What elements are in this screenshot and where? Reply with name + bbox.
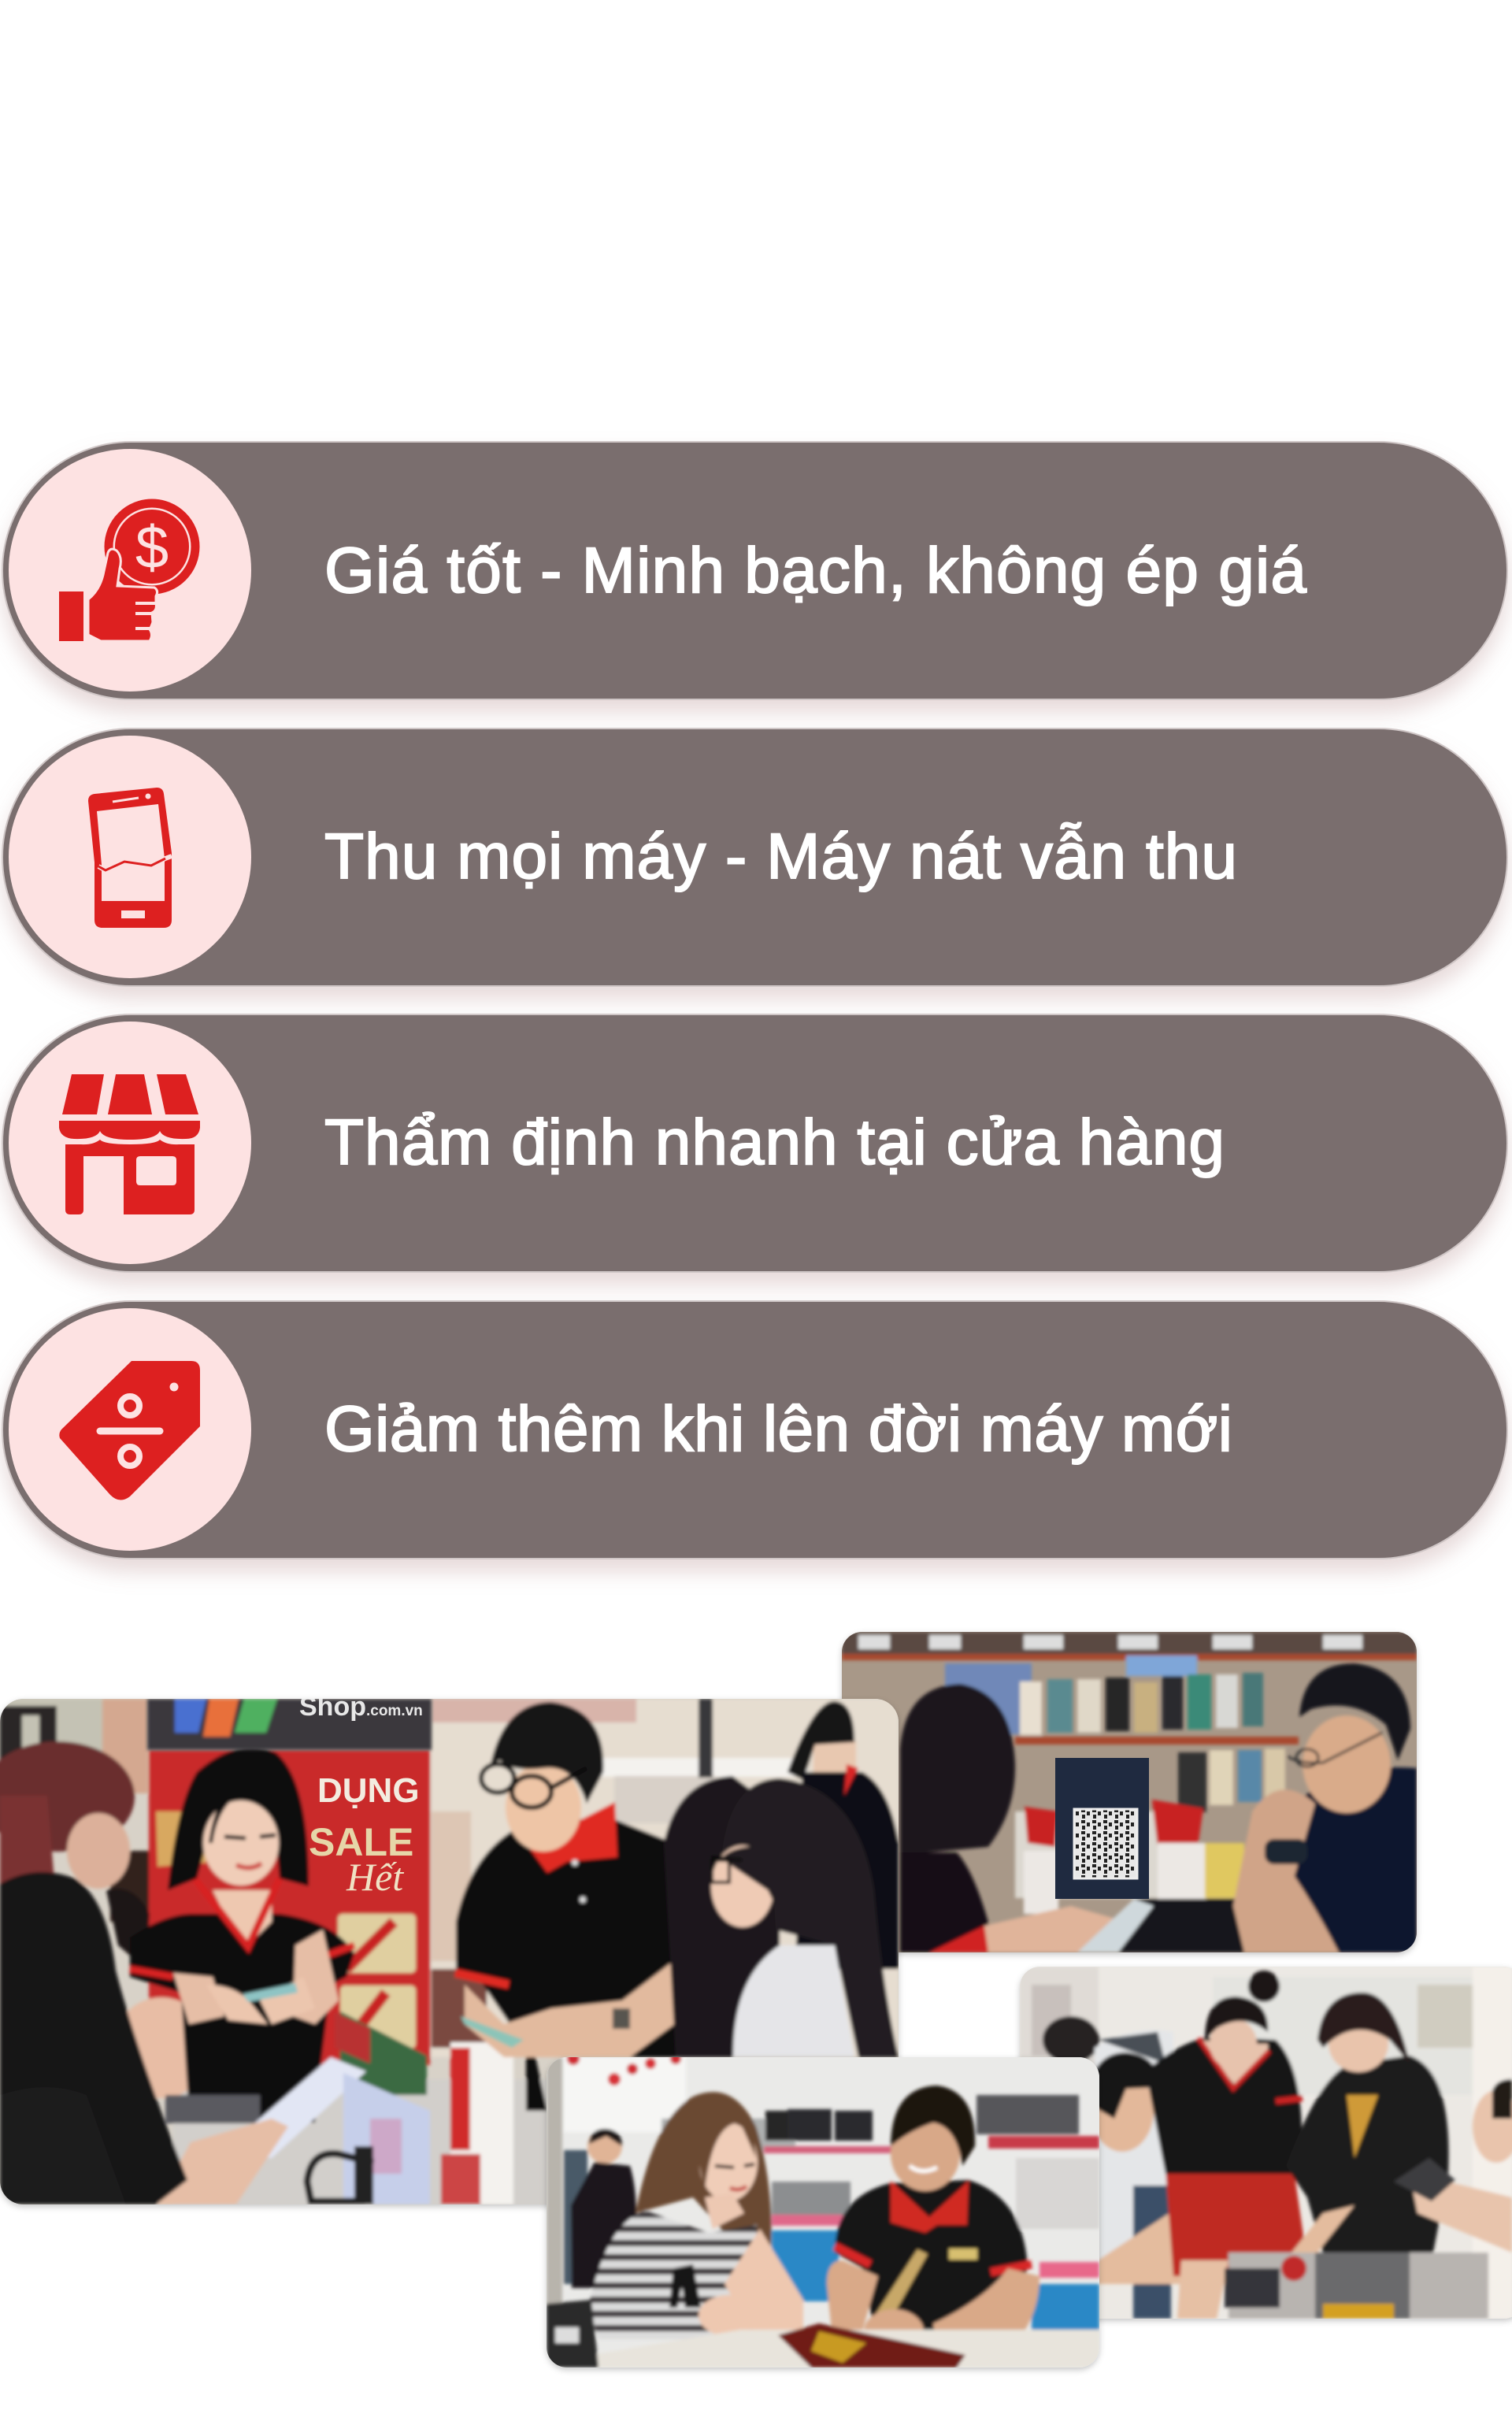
icon circle <box>9 449 251 692</box>
benefit text 1: Giá tốt - Minh bạch, không ép giá <box>324 535 1306 606</box>
icon: thumbs up holding a dollar coin <box>59 503 195 641</box>
photo: main store scene with staff and customers: Hết <box>346 1855 404 1899</box>
panel: benefit pill 1 <box>2 442 1507 699</box>
icon circle <box>9 736 251 978</box>
icon: storefront <box>59 1074 200 1214</box>
icon circle <box>9 1022 251 1264</box>
benefit text 4: Giảm thêm khi lên đời máy mới <box>324 1393 1232 1465</box>
QR code sign <box>1055 1758 1149 1899</box>
panel: benefit pill 4 <box>2 1301 1507 1559</box>
icon: cracked smartphone <box>88 788 172 928</box>
photo: staff and customer scanning QR code at counter <box>842 1632 1417 1952</box>
photo: main store scene with staff and customers: DỤNG <box>317 1771 420 1810</box>
icon: thumbs up holding a dollar coin: $ <box>135 514 169 581</box>
icon circle <box>9 1308 251 1551</box>
photo: main store scene with staff and customers: Shop.com.vn <box>299 1692 423 1722</box>
photo: main store scene with staff and customers <box>0 1692 899 2209</box>
panel: benefit pill 3 <box>2 1014 1507 1272</box>
photo: consultant talking with a customer <box>547 2052 1099 2368</box>
store banner text <box>147 1699 432 1750</box>
benefit text 2: Thu mọi máy - Máy nát vẫn thu <box>324 821 1237 892</box>
benefit text 3: Thẩm định nhanh tại cửa hàng <box>324 1107 1225 1178</box>
panel: benefit pill 2 <box>2 729 1507 986</box>
icon: discount price tag <box>59 1361 200 1500</box>
photo: staff helping customers at store on the right <box>1020 1967 1512 2319</box>
photo: main store scene with staff and customers: SALE <box>309 1820 413 1864</box>
